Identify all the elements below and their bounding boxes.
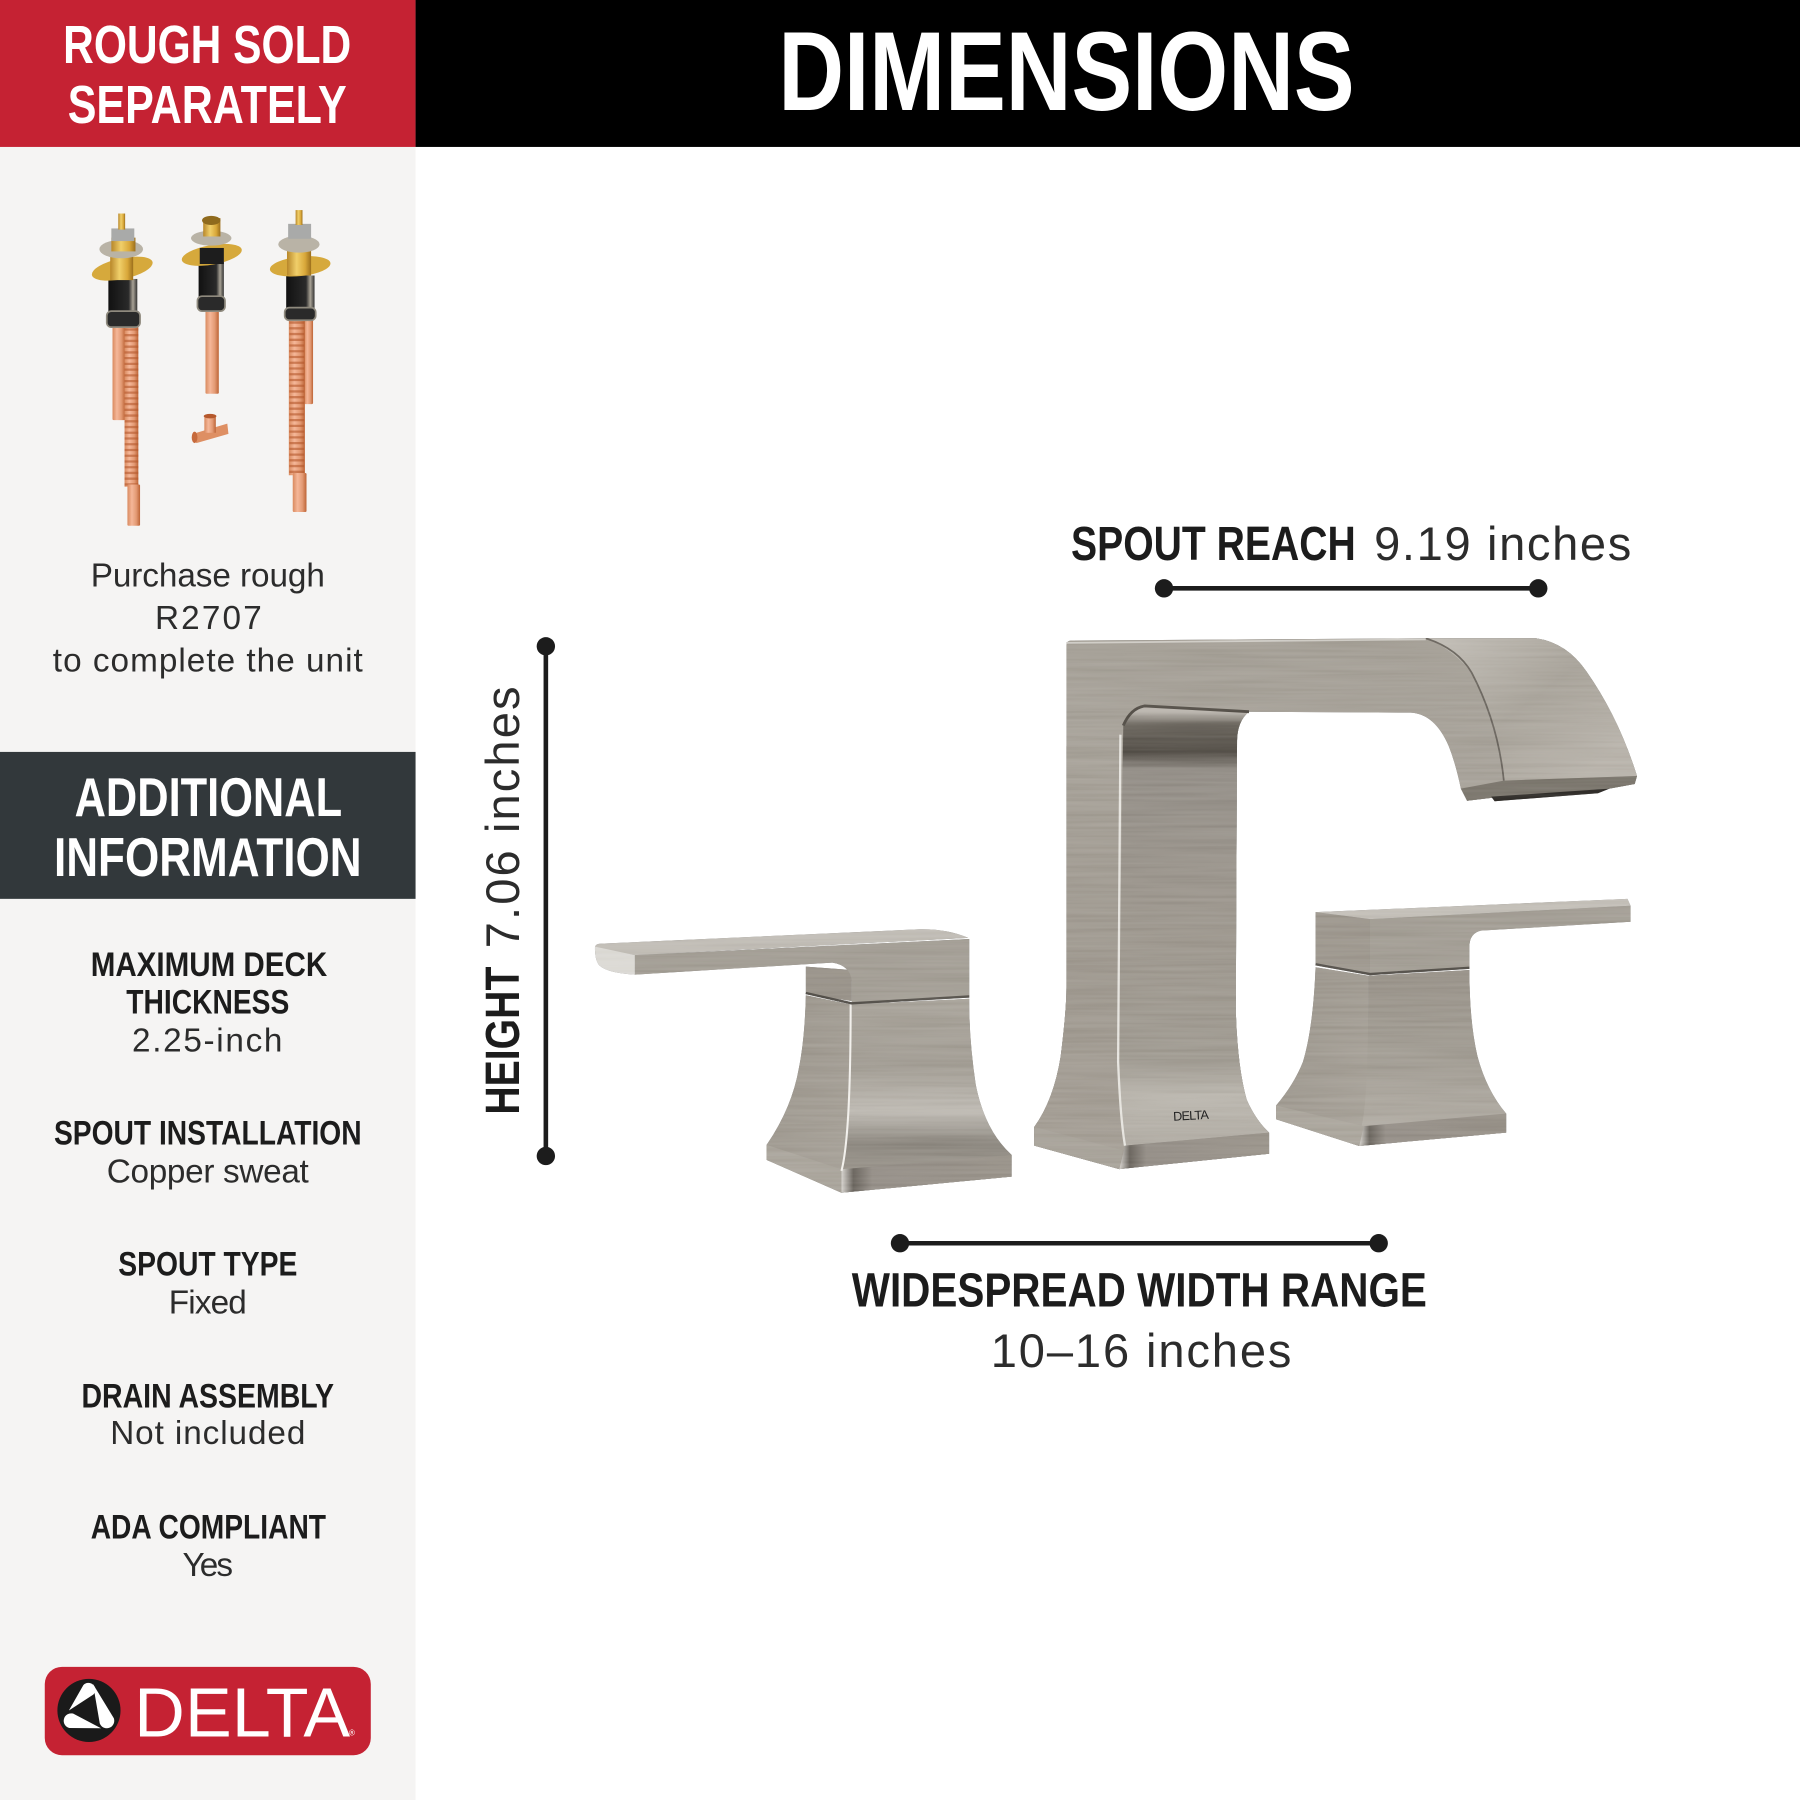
spec: maximum deck thickness: MAXIMUM DECK	[91, 946, 327, 984]
banner: rough sold separately: ROUGH SOLD	[63, 15, 351, 75]
spec: maximum deck thickness: 2.25-inch	[132, 1023, 282, 1060]
spec: spout installation	[54, 1115, 362, 1190]
spec: spout type	[118, 1245, 297, 1321]
spec: ADA compliant: ADA COMPLIANT	[91, 1508, 326, 1546]
heading: additional information	[0, 752, 416, 899]
spec: drain assembly	[82, 1377, 334, 1452]
valve right	[269, 210, 331, 512]
faucet product image	[595, 638, 1637, 1193]
valve left	[90, 214, 155, 526]
dimension: height: HEIGHT	[476, 967, 530, 1115]
spec: ADA compliant: Yes	[183, 1547, 233, 1584]
faucet logo text: DELTA	[1173, 1108, 1210, 1124]
spec: spout installation: Copper sweat	[107, 1153, 309, 1190]
spec: spout type: Fixed	[169, 1284, 247, 1321]
text: purchase rough: Purchase rough	[91, 558, 325, 595]
right handle	[1276, 899, 1631, 1146]
spout body	[1034, 638, 1637, 1169]
text: purchase rough: to complete the unit	[53, 643, 363, 680]
text: purchase rough: R2707	[155, 600, 262, 637]
dimension: widespread width range	[852, 1234, 1427, 1377]
left sidebar panel	[0, 147, 416, 1800]
dimension: height	[476, 637, 555, 1165]
banner: dimensions title	[416, 0, 1800, 147]
spec: spout type: SPOUT TYPE	[118, 1245, 297, 1283]
text: purchase rough	[53, 558, 363, 680]
dimension: widespread width range: WIDESPREAD WIDTH RANGE	[852, 1263, 1427, 1317]
spec: drain assembly: DRAIN ASSEMBLY	[82, 1377, 334, 1415]
copper tee fitting	[192, 414, 228, 443]
valve middle	[180, 216, 243, 394]
heading: additional information: INFORMATION	[54, 826, 362, 888]
spec: maximum deck thickness: THICKNESS	[126, 984, 289, 1022]
logo: Delta: ®	[349, 1729, 355, 1738]
spec: ADA compliant	[91, 1508, 326, 1584]
spec: spout installation: SPOUT INSTALLATION	[54, 1115, 362, 1153]
banner: rough sold separately	[0, 0, 416, 147]
dimension: spout reach: SPOUT REACH	[1071, 517, 1356, 571]
rough valve parts image	[90, 210, 331, 526]
banner: rough sold separately: SEPARATELY	[68, 75, 347, 135]
dimension: spout reach	[1071, 517, 1631, 598]
dimension: height: 7.06 inches	[476, 686, 529, 948]
spec: maximum deck thickness	[91, 946, 327, 1060]
left handle	[595, 929, 1012, 1193]
logo: Delta	[45, 1667, 371, 1755]
heading: additional information: ADDITIONAL	[75, 766, 342, 828]
spec: drain assembly: Not included	[110, 1415, 305, 1452]
banner: dimensions title: DIMENSIONS	[778, 8, 1355, 134]
logo: Delta: DELTA	[134, 1673, 350, 1751]
dimension: widespread width range: 10–16 inches	[991, 1324, 1291, 1377]
dimension: spout reach: 9.19 inches	[1374, 517, 1631, 570]
